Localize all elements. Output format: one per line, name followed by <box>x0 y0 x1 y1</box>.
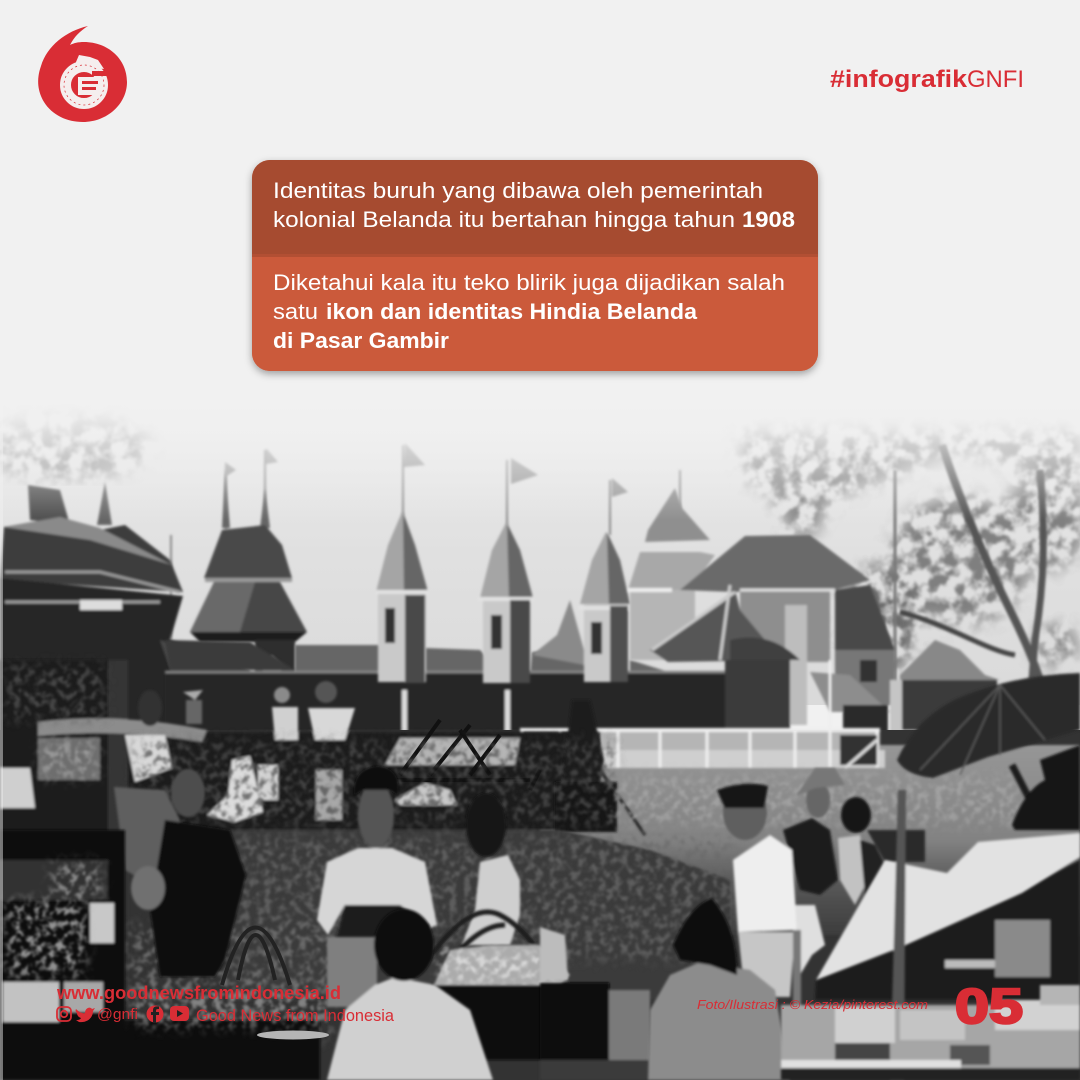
man from behind bottom centre <box>327 909 493 1080</box>
right group of people <box>717 768 925 1030</box>
tree foliage upper left <box>0 411 150 479</box>
basket and produce right <box>428 912 609 1060</box>
seated woman in dark clothes <box>114 769 246 977</box>
icon: instagram <box>57 1007 71 1021</box>
domed tower left <box>190 468 307 705</box>
left pavilion <box>0 482 250 760</box>
icon: youtube <box>170 1006 189 1021</box>
card text <box>273 178 795 353</box>
plate <box>257 1030 329 1040</box>
sky <box>0 405 1080 705</box>
handle: @gnfi <box>97 1006 138 1023</box>
historic photo: Pasar Gambir market <box>0 400 1080 1080</box>
card text: Identitas buruh yang dibawa oleh pemerintah <box>273 178 763 203</box>
sacks and dark box right of centre <box>540 927 650 1080</box>
logo emblem: eagle ring with G <box>64 55 112 105</box>
market stall tent <box>816 790 1080 1080</box>
stacked boxes bottom right <box>781 985 1080 1080</box>
card upper panel <box>252 160 818 254</box>
page name: Good News from Indonesia <box>196 1006 395 1025</box>
base tone lower photo <box>0 730 1080 1080</box>
card text: Diketahui kala itu teko blirik juga dijadikan salah <box>273 270 785 295</box>
card text: kolonial Belanda itu bertahan hingga tahun <box>273 207 735 232</box>
market stall under tent <box>815 860 1080 1000</box>
GNFI logo <box>38 26 127 122</box>
photo credit: Foto/Ilustrasi : © Kezia/pinterest.com <box>697 997 928 1012</box>
flags and poles <box>171 443 680 640</box>
right hall roofs <box>628 488 1000 760</box>
tree trunks and branches right <box>895 445 1043 770</box>
card text: di Pasar Gambir <box>273 328 449 353</box>
umbrella <box>897 673 1080 830</box>
hashtag <box>830 66 1024 93</box>
hashtag: GNFI <box>967 66 1024 93</box>
spiky stall silhouettes <box>380 720 540 790</box>
white fence <box>520 660 885 768</box>
hashtag: #infografik <box>830 66 968 93</box>
icon: twitter <box>76 1008 95 1022</box>
basket handles left <box>222 928 290 985</box>
long hall behind market <box>165 640 730 735</box>
card text: 1908 <box>742 207 795 232</box>
card shadow base <box>252 160 818 371</box>
mottled fruit in basket <box>440 950 560 982</box>
dark earth <box>230 830 730 1000</box>
mottled produce <box>6 862 325 1028</box>
icon: facebook <box>146 1006 164 1023</box>
man from behind grey shirt <box>648 898 790 1080</box>
logo red body <box>38 26 127 122</box>
page number: 05 <box>955 980 1023 1034</box>
mottled grass texture <box>5 665 1020 1040</box>
three slender towers <box>376 512 632 683</box>
fade of photo into background <box>0 400 1080 520</box>
tree foliage right <box>740 430 1080 675</box>
website url: www.goodnewsfromindonesia.id <box>56 983 341 1003</box>
card lower panel <box>252 354 818 371</box>
man in white shirt centre <box>317 766 437 945</box>
left background stalls and crowd <box>0 660 578 1000</box>
card text: ikon dan identitas Hindia Belanda <box>326 299 698 324</box>
footer website and socials <box>56 983 395 1025</box>
text card <box>252 160 818 371</box>
ground with fence field <box>540 745 1080 935</box>
card text: satu <box>273 299 318 324</box>
market goods bottom left <box>0 830 320 1080</box>
person in white behind basket <box>462 793 520 945</box>
figure on right of crowd <box>555 700 645 835</box>
